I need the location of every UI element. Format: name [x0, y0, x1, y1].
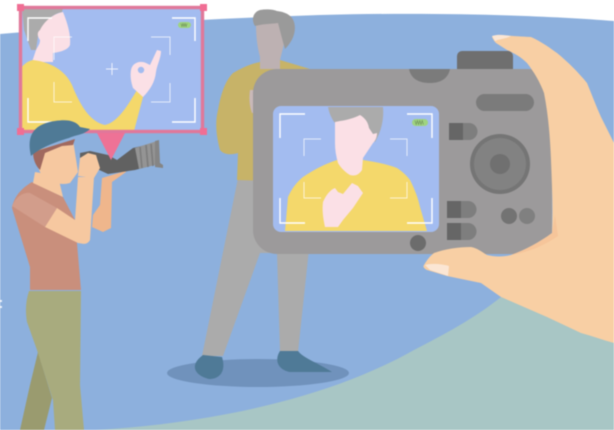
hand [131, 50, 161, 97]
hand holding camera [423, 35, 614, 343]
green ground [96, 297, 614, 430]
hair under cap [33, 139, 75, 170]
battery icon [178, 22, 191, 28]
frame border [20, 8, 202, 132]
hair [22, 8, 63, 50]
shoes [195, 351, 332, 379]
hidden hand [249, 90, 256, 113]
shirt [216, 60, 310, 181]
viewfinder screen [21, 8, 203, 132]
lens flange [155, 140, 163, 168]
camera body [253, 69, 552, 254]
LCD brackets [280, 114, 432, 223]
face [32, 12, 70, 62]
upper nail [492, 35, 511, 41]
near arm [45, 177, 94, 244]
left edge dots [0, 300, 2, 308]
side buttons [461, 123, 478, 240]
neck [33, 172, 63, 197]
far arm [92, 162, 126, 232]
hair [253, 9, 295, 49]
sweater on LCD [285, 160, 427, 231]
focus brackets [28, 18, 195, 122]
head and neck [256, 22, 284, 69]
cap [30, 120, 90, 156]
grille [476, 94, 534, 111]
thumb shadow [511, 215, 558, 255]
trousers [202, 170, 310, 356]
photographer [12, 120, 163, 430]
sleeve [12, 193, 57, 227]
hair on LCD [328, 107, 383, 142]
top dial block [457, 51, 513, 75]
face on LCD [335, 115, 377, 175]
corner handles [17, 4, 207, 135]
front leg [26, 291, 84, 430]
LCD battery [412, 119, 428, 126]
dial [470, 134, 530, 194]
t-shirt [12, 182, 81, 290]
compact camera [253, 51, 552, 254]
crosshair [106, 63, 118, 75]
hand on LCD [323, 183, 363, 227]
standing man [167, 9, 349, 387]
face [37, 140, 78, 184]
LCD screen [273, 106, 439, 232]
viewfinder frame [17, 4, 207, 135]
LCD inner brackets [304, 139, 407, 198]
inner brackets [54, 37, 170, 102]
telephoto camera [80, 140, 163, 174]
yellow sweater [21, 60, 143, 131]
lens rings [135, 141, 159, 169]
small buttons [501, 208, 517, 224]
ground shadow [167, 359, 349, 387]
finger loop [138, 67, 144, 73]
lower nail [425, 264, 449, 276]
viewfinder pointer [97, 133, 125, 160]
back leg [20, 352, 52, 430]
near fist [78, 153, 100, 178]
top bump [409, 69, 450, 83]
